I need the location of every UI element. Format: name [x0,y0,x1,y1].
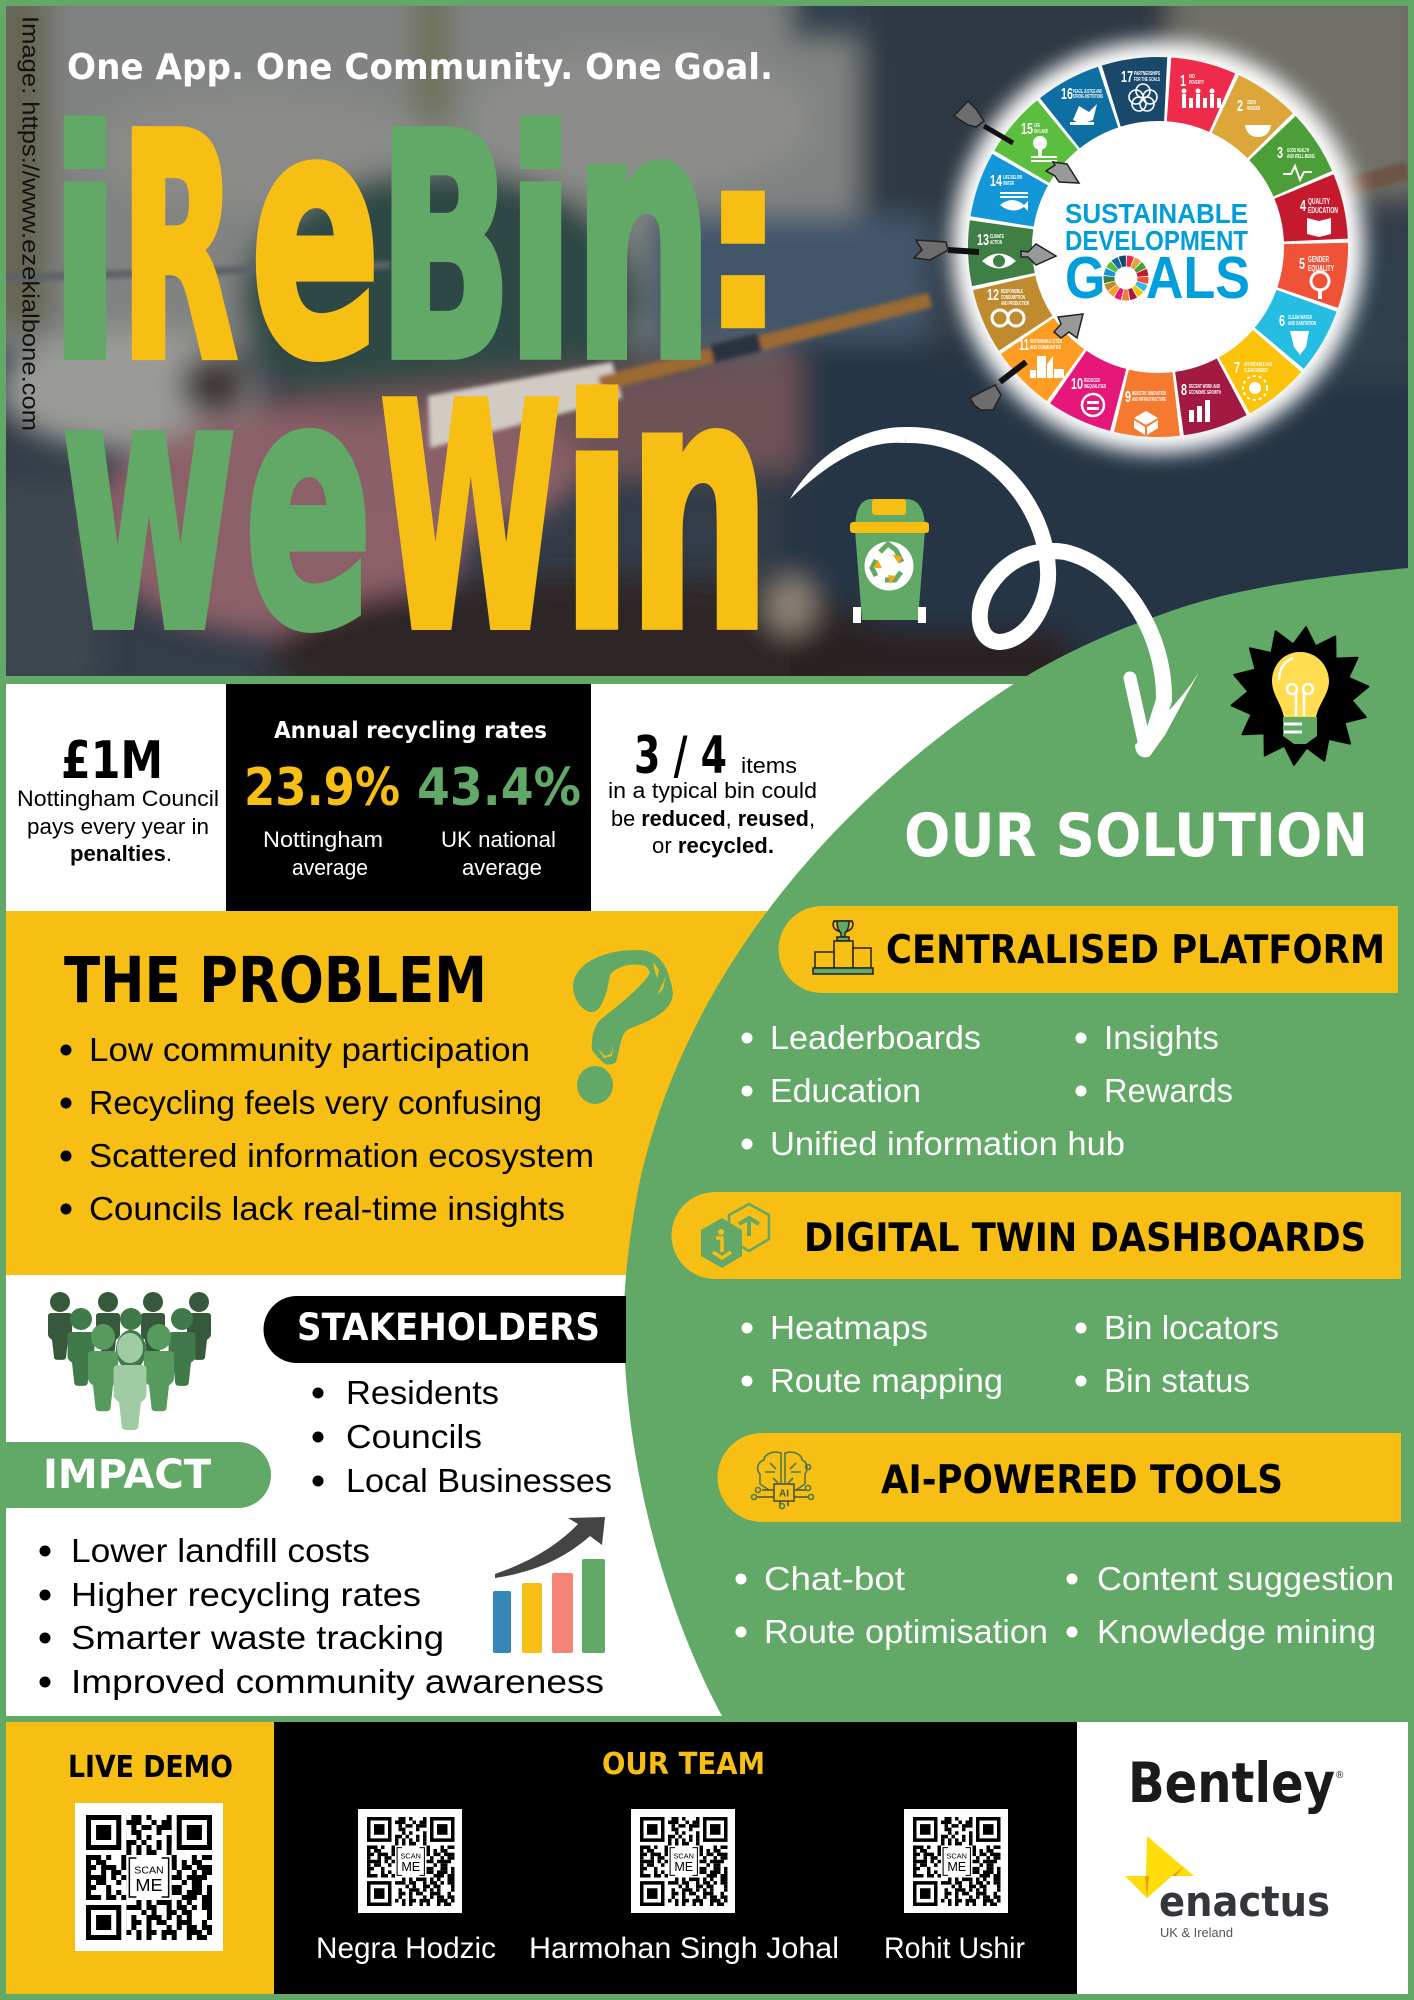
recycling bin icon [850,499,929,623]
icon: AI brain circuit: AI [779,1488,789,1500]
title: iReBin:: : [702,106,784,380]
SDG wheel: CLEAN WATER [1288,315,1312,321]
SDG wheel: AND PRODUCTION [1001,301,1029,307]
impact bullet list: Improved community awareness [71,1663,604,1700]
SDG wheel: ECONOMIC GROWTH [1189,390,1221,396]
bar chart with rising arrow [493,1517,605,1653]
heading pill: impact [6,1442,271,1508]
SDG wheel: 15 [1021,121,1033,138]
stat: annual recycling rates: Annual recycling rates [274,718,547,744]
centralised platform bullets: Rewards [1104,1072,1233,1109]
SDG wheel: INEQUALITIES [1084,384,1106,390]
title: weWin [61,302,770,707]
panel: our team: ME [401,1860,420,1874]
stakeholders bullet list: Councils [346,1418,482,1455]
AI tools bullets: Chat-bot [764,1560,905,1597]
stat: annual recycling rates [244,718,581,880]
SDG wheel: REDUCED [1084,378,1100,384]
centralised platform bullets [742,1019,1233,1162]
SDG wheel [935,24,1381,470]
title: weWin: i [562,337,632,699]
title: weWin: W [380,342,561,699]
SDG wheel: SUSTAINABLE CITIES [1030,339,1062,345]
title: weWin: e [245,308,372,704]
centralised platform bullets: Insights [1104,1019,1219,1056]
problem bullet list: Low community participation [89,1031,530,1068]
SDG wheel: AND SANITATION [1288,321,1316,327]
image credit: Image: https://www.ezekialbone.com [18,16,44,431]
stat: three quarters of items: 3 / 4 [634,726,727,786]
panel: our team: SCAN [401,1852,421,1861]
SDG wheel: CLEAN ENERGY [1244,368,1268,374]
icon: AI brain circuit [752,1452,814,1508]
AI tools bullets: Knowledge mining [1097,1613,1376,1650]
AI tools bullets [736,1560,1394,1650]
panel: our team: OUR TEAM [602,1747,765,1782]
SDG wheel: LIFE BELOW [1003,175,1022,181]
stakeholders bullet list [312,1374,612,1499]
digital twin bullets: Bin status [1104,1362,1250,1399]
SDG wheel: DECENT WORK AND [1189,384,1220,390]
problem bullet list: Scattered information ecosystem [89,1137,594,1174]
problem bullet list: Recycling feels very confusing [89,1084,542,1121]
AI tools bullets: Route optimisation [764,1613,1048,1650]
heading pill: AI powered tools: AI-POWERED TOOLS [881,1458,1283,1503]
title: iReBin:: i [50,68,120,428]
SDG wheel: AND COMMUNITIES [1030,345,1061,351]
heading pill: stakeholders [263,1296,626,1363]
stat: penalties: Nottingham Council [17,786,219,811]
SDG wheel: EQUALITY [1308,264,1334,273]
title: iReBin: [50,39,784,436]
SDG wheel: NO [1189,74,1196,80]
stat: annual recycling rates: average [462,855,542,880]
digital twin bullets [742,1309,1279,1399]
heading pill: centralised platform [778,906,1398,993]
heading: the problem: THE PROBLEM [64,944,487,1017]
panel: our team: SCAN [674,1852,694,1861]
panel: live demo: LIVE DEMO [68,1750,233,1785]
SDG wheel: CLIMATE [990,234,1004,240]
SDG wheel: 10 [1071,376,1083,393]
SDG wheel: RESPONSIBLE [1001,289,1023,295]
SDG wheel: HUNGER [1247,106,1260,112]
panel: sponsor logos [1077,1722,1408,1994]
title: iReBin:: B [378,70,512,427]
heading pill: impact: IMPACT [43,1452,212,1498]
panel: our team: Negra Hodzic [316,1932,496,1965]
panel: our team: SCAN [947,1852,967,1861]
SDG wheel: AND INFRASTRUCTURE [1132,397,1166,403]
panel: our team: Harmohan Singh Johal [529,1932,839,1965]
SDG wheel: ON LAND [1034,129,1048,135]
SDG wheel: AFFORDABLE AND [1244,362,1272,368]
stat: three quarters of items: items [741,753,797,778]
panel: our team [274,1722,1077,1994]
stat: three quarters of items [608,726,817,858]
stat cell: recycling rates background [226,684,591,911]
centralised platform bullets: Unified information hub [770,1125,1125,1162]
panel: sponsor logos: ® [1336,1770,1344,1781]
panel: our team: ME [947,1860,966,1874]
stat: three quarters of items: in a typical bin could [608,778,817,803]
swooping white arrow [790,427,1199,757]
SDG wheel: 3 [1277,145,1283,162]
stat: penalties [17,731,219,866]
panel: sponsor logos: UK & Ireland [1160,1925,1233,1940]
impact bullet list: Smarter waste tracking [71,1619,444,1656]
problem bullet list: Councils lack real-time insights [89,1190,565,1227]
SDG wheel: QUALITY [1308,197,1330,206]
SDG wheel: 4 [1300,198,1306,215]
impact bullet list: Lower landfill costs [71,1532,370,1569]
stakeholders bullet list: Residents [346,1374,499,1411]
SDG wheel: AND WELL-BEING [1287,154,1315,160]
stat: annual recycling rates: 43.4% [417,758,581,818]
panel: sponsor logos: Bentley [1128,1751,1335,1815]
title: iReBin:: i [506,69,575,428]
SDG wheel: 11 [1019,337,1029,354]
SDG wheel: PEACE, JUSTICE AND [1073,89,1102,95]
heading: our solution: OUR SOLUTION [904,801,1368,871]
icon: light bulb in black burst [1227,621,1373,771]
heading pill: digital twin dashboards: DIGITAL TWIN DASHBOARDS [804,1216,1366,1261]
icon: stakeholder crowd [48,1292,211,1430]
stat cell: typical bin background [591,684,1021,911]
panel: the problem background [6,911,786,1275]
centralised platform bullets: Education [770,1072,921,1109]
stat: three quarters of items: or recycled. [652,833,774,858]
SDG wheel: CONSUMPTION [1001,295,1025,301]
SDG wheel: GOOD HEALTH [1287,148,1309,154]
SDG wheel: 16 [1061,86,1073,103]
panel: stakeholders and impact background [6,1275,766,1716]
SDG logo text: DEVELOPMENT [1065,225,1248,256]
digital twin bullets: Bin locators [1104,1309,1279,1346]
title: weWin: n [628,307,770,707]
stat: penalties: £1M [61,731,163,791]
title: weWin: w [61,302,237,707]
SDG wheel: FOR THE GOALS [1134,77,1160,83]
impact bullet list: Higher recycling rates [71,1576,421,1613]
SDG logo text [1065,198,1250,311]
stat: annual recycling rates: UK national [441,827,556,852]
icon: digital twin hexagons [701,1204,769,1268]
digital twin bullets: Route mapping [770,1362,1003,1399]
SDG wheel: 5 [1299,256,1305,273]
AI tools bullets: Content suggestion [1097,1560,1394,1597]
stakeholders bullet list: Local Businesses [346,1462,612,1499]
heading pill: AI powered tools [718,1433,1401,1522]
title: iReBin:: n [573,39,713,436]
SDG wheel: 6 [1279,313,1285,330]
impact bullet list [40,1532,604,1700]
problem bullet list [60,1031,594,1227]
panel: our team: Rohit Ushir [884,1932,1025,1965]
SDG wheel: 13 [977,232,989,249]
stat: penalties: pays every year in [27,814,209,839]
heading pill: digital twin dashboards [672,1192,1401,1279]
stat cell: penalties background [6,684,226,911]
SDG wheel: 17 [1121,69,1133,86]
SDG wheel: POVERTY [1189,80,1204,86]
SDG logo text: SUSTAINABLE [1065,198,1248,229]
centralised platform bullets: Leaderboards [770,1019,981,1056]
title: iReBin:: R [120,71,237,429]
panel: our team: ME [674,1860,693,1874]
SDG wheel: GENDER [1308,255,1329,264]
SDG wheel: WATER [1003,181,1014,187]
digital twin bullets: Heatmaps [770,1309,928,1346]
panel: sponsor logos: enactus [1159,1877,1330,1926]
heading pill: stakeholders: STAKEHOLDERS [297,1306,600,1349]
hero photo: archer drawing a bow [0,0,1414,735]
SDG wheel: 2 [1237,98,1243,115]
SDG wheel: LIFE [1034,123,1040,129]
SDG wheel: ZERO [1247,100,1256,106]
panel: live demo: ME [135,1875,163,1895]
SDG wheel: 8 [1181,382,1187,399]
stat: annual recycling rates: average [292,855,368,880]
panel: our solution curved green background [624,568,1408,1722]
SDG wheel: INDUSTRY, INNOVATION [1132,391,1166,397]
SDG wheel: 7 [1234,360,1240,377]
SDG wheel: 14 [990,173,1002,190]
stat: annual recycling rates: 23.9% [244,758,400,818]
SDG wheel: ACTION [990,240,1002,246]
SDG wheel: 1 [1180,73,1186,90]
title: iReBin:: e [250,41,380,432]
SDG wheel: 12 [987,287,999,304]
stat: annual recycling rates: Nottingham [263,827,383,852]
stat: three quarters of items: be reduced, reused, [611,806,815,831]
tagline: One App. One Community. One Goal. [67,47,773,88]
SDG wheel: EDUCATION [1308,206,1338,215]
icon: question mark [573,950,673,1104]
SDG wheel: PARTNERSHIPS [1134,71,1160,77]
SDG logo text: GOALS [1065,245,1250,311]
icon: podium with trophy [813,921,873,974]
SDG wheel: STRONG INSTITUTIONS [1073,94,1103,100]
SDG wheel: 9 [1125,389,1131,406]
panel: live demo: SCAN [134,1865,164,1876]
arrows piercing the wheel [914,101,1083,410]
panel: live demo [6,1722,274,1994]
stat: penalties: penalties. [70,841,172,866]
